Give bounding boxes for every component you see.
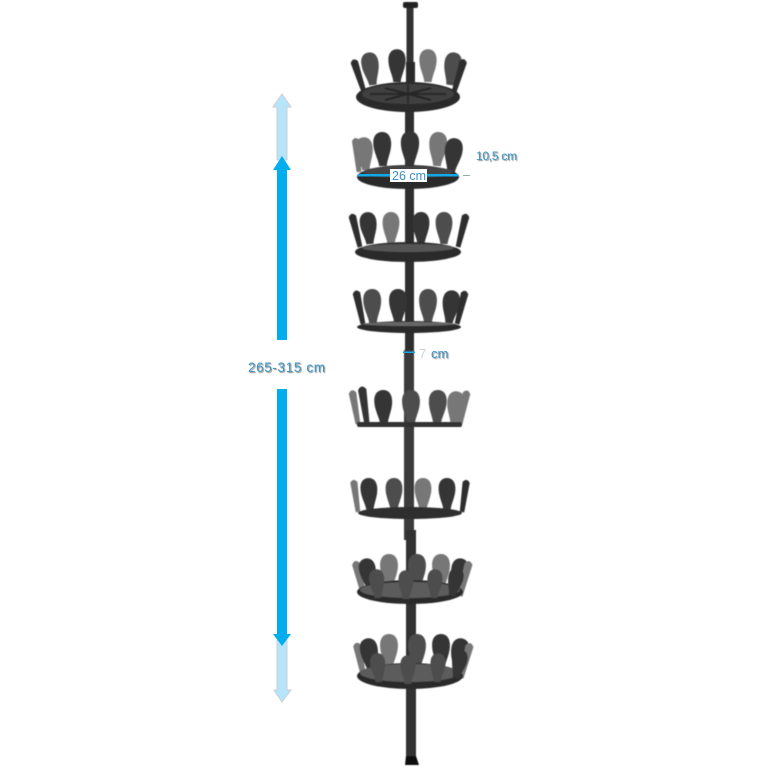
dimension: pole diameter: cm [431,346,448,361]
tier 7 [351,554,473,604]
dimension: shelf diameter: 26 cm [392,169,426,183]
label: shelf height: 10,5 cm [476,149,517,163]
arrow: base height, upward [273,156,291,340]
tier 3 [348,211,470,262]
dimension: pole diameter [403,346,448,361]
tier 8 [353,634,474,689]
tier 4 [352,289,469,333]
dimension: shelf diameter [358,169,470,183]
arrow: extended height, bottom [274,640,291,702]
tier 1 [350,49,468,112]
tier 5 [348,386,471,427]
dimension: pole diameter: 7 [419,346,426,361]
tier 2 [352,131,464,189]
arrow: base height, downward [273,389,291,646]
telescopic pole [403,2,419,765]
tier 6 [350,478,470,519]
label: total height: 265-315 cm [248,360,325,375]
arrow: extended height, top [273,94,291,160]
shoe rack [348,2,474,765]
